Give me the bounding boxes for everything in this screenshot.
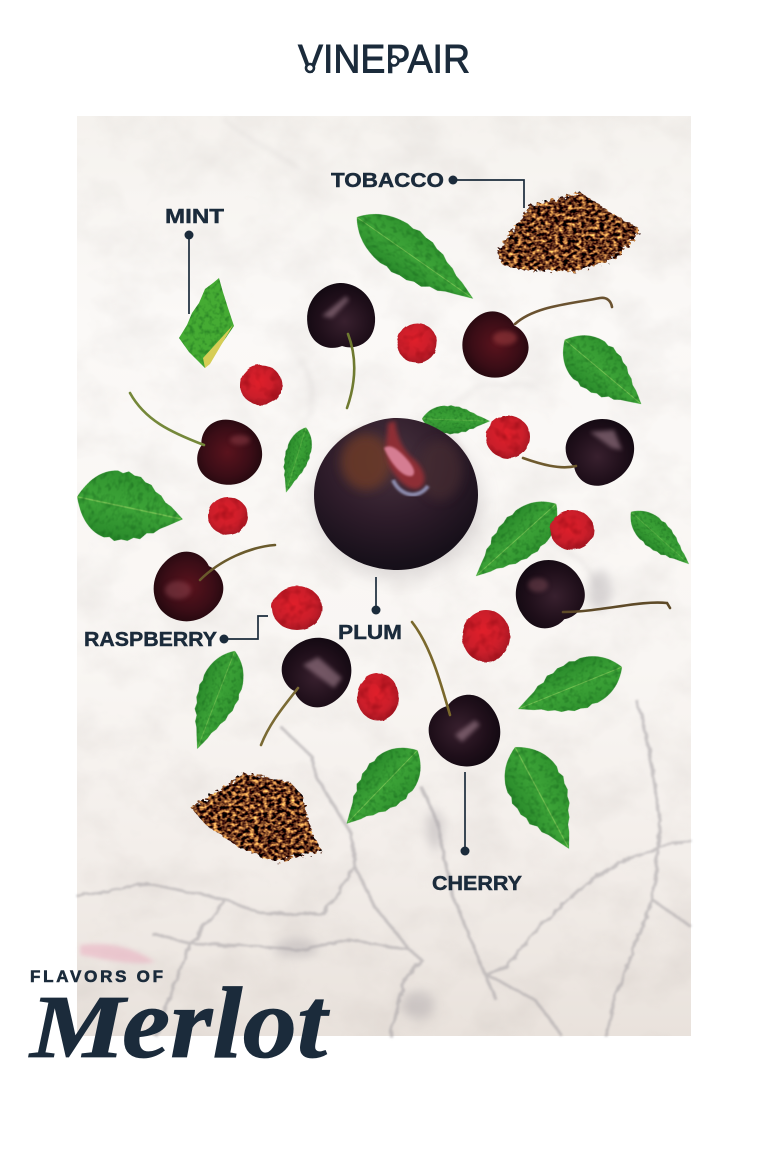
- cherry: left: [130, 393, 270, 493]
- label: plum: [338, 577, 402, 644]
- panel: marble background: [77, 116, 691, 1037]
- mint leaf: right of plum: [460, 487, 572, 593]
- mint leaf: lower right: [509, 644, 631, 732]
- cherry: lower right: [503, 547, 670, 638]
- raspberry 1: [240, 365, 282, 405]
- tobacco pile: top right: [497, 192, 640, 272]
- cherry: top centre: [306, 282, 376, 408]
- mint leaf: far right: [621, 501, 699, 575]
- mint leaf: mint label: [179, 278, 234, 368]
- mint leaf: top centre: [343, 197, 487, 319]
- cherry: right: [523, 406, 647, 495]
- mint leaf: small left of plum: [274, 424, 318, 496]
- cherry: top right: [448, 298, 612, 392]
- label: mint: [165, 205, 225, 314]
- label: cherry: CHERRY: [432, 872, 522, 895]
- cherry: bottom left: [261, 623, 366, 745]
- raspberry 2: [397, 323, 437, 363]
- raspberry 4: [208, 497, 248, 535]
- raspberry 6: [272, 586, 322, 630]
- mint leaf: behind plum: [422, 404, 490, 436]
- mint leaf: right upper: [548, 320, 658, 424]
- raspberry 5: [550, 510, 594, 550]
- raspberry 7: [462, 610, 510, 662]
- mint leaf: lower left: [178, 643, 254, 757]
- title: Flavors of Merlot: erlot: [122, 967, 330, 1080]
- cherry: bottom centre: [412, 622, 515, 781]
- mint leaf: bottom centre: [328, 733, 436, 841]
- label: mint: MINT: [165, 205, 225, 228]
- label: plum: PLUM: [338, 621, 402, 644]
- title: Flavors of Merlot: M: [28, 978, 129, 1077]
- title: Flavors of Merlot: [28, 967, 330, 1080]
- raspberry 3: [486, 416, 530, 458]
- label: raspberry: RASPBERRY: [84, 628, 217, 651]
- raspberry 8: [357, 674, 399, 720]
- tobacco pile: bottom left: [191, 773, 322, 862]
- cherry: lower left: [139, 541, 275, 636]
- plum: [314, 418, 482, 577]
- label: cherry: [432, 772, 522, 895]
- title: Flavors of Merlot: FLAVORS OF: [30, 967, 163, 986]
- mint leaf: far left: [70, 462, 190, 554]
- label: raspberry: [84, 616, 268, 651]
- label: tobacco: TOBACCO: [331, 169, 444, 192]
- logo: VinePair: VINEPAIR: [298, 38, 470, 82]
- label: tobacco: [331, 169, 524, 208]
- mint leaf: bottom right: [489, 734, 595, 862]
